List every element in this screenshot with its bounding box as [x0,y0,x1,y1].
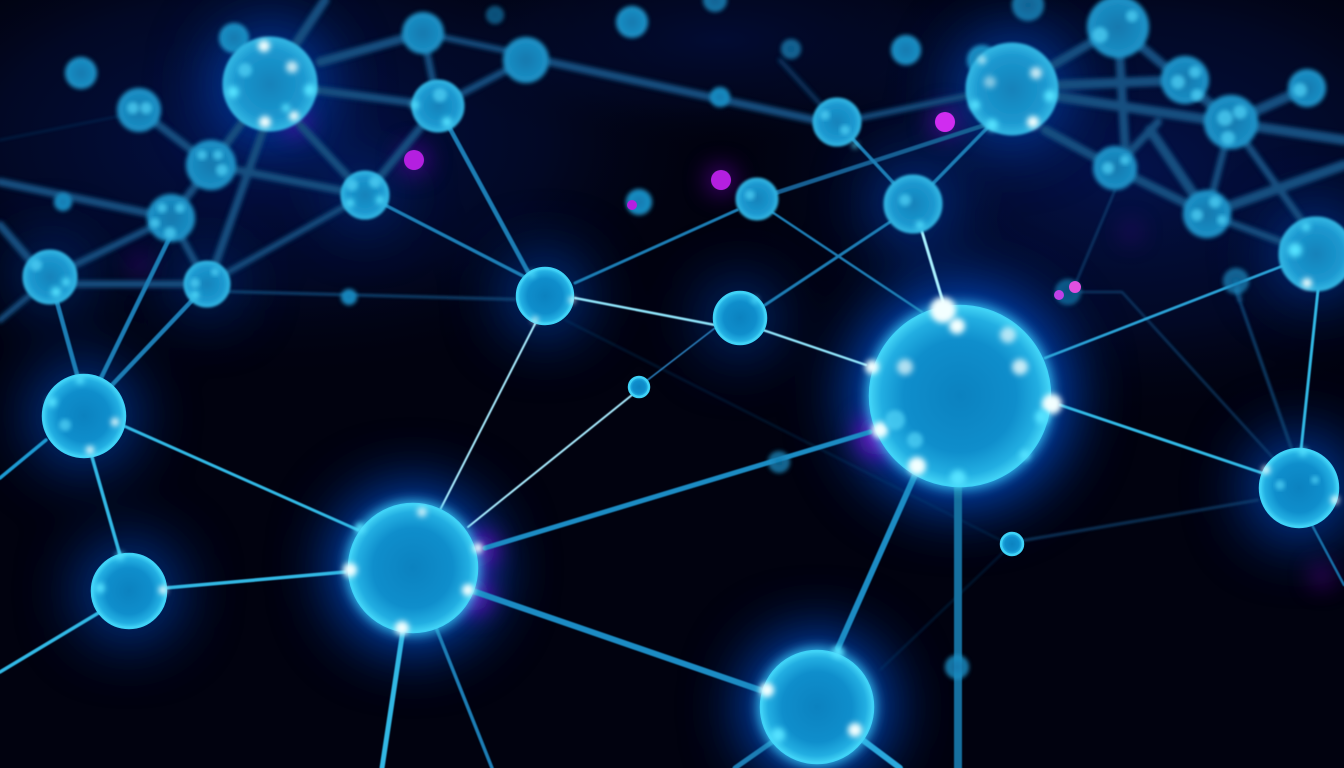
purple glow accents [130,108,1332,612]
foreground sphere: lower left [92,552,167,628]
faint background connections [0,112,1292,670]
light spots on background spheres [127,10,1307,239]
foreground sphere: left [43,375,125,457]
magenta accent dots [404,112,1081,300]
foreground sphere: right [1260,448,1339,527]
ambient navy haze [0,0,1344,430]
central spheres [517,268,1023,555]
blurred upper connections [0,0,1344,320]
mid spheres, upper area [23,37,1344,307]
cyan rim glow behind large spheres [346,303,1053,766]
foreground sphere: lower centre left [343,504,483,635]
bright foreground connections [0,225,1318,768]
foreground sphere: large centre right [865,297,1062,486]
highlights on mid spheres [30,40,1312,299]
foreground sphere: bottom centre [760,646,873,763]
